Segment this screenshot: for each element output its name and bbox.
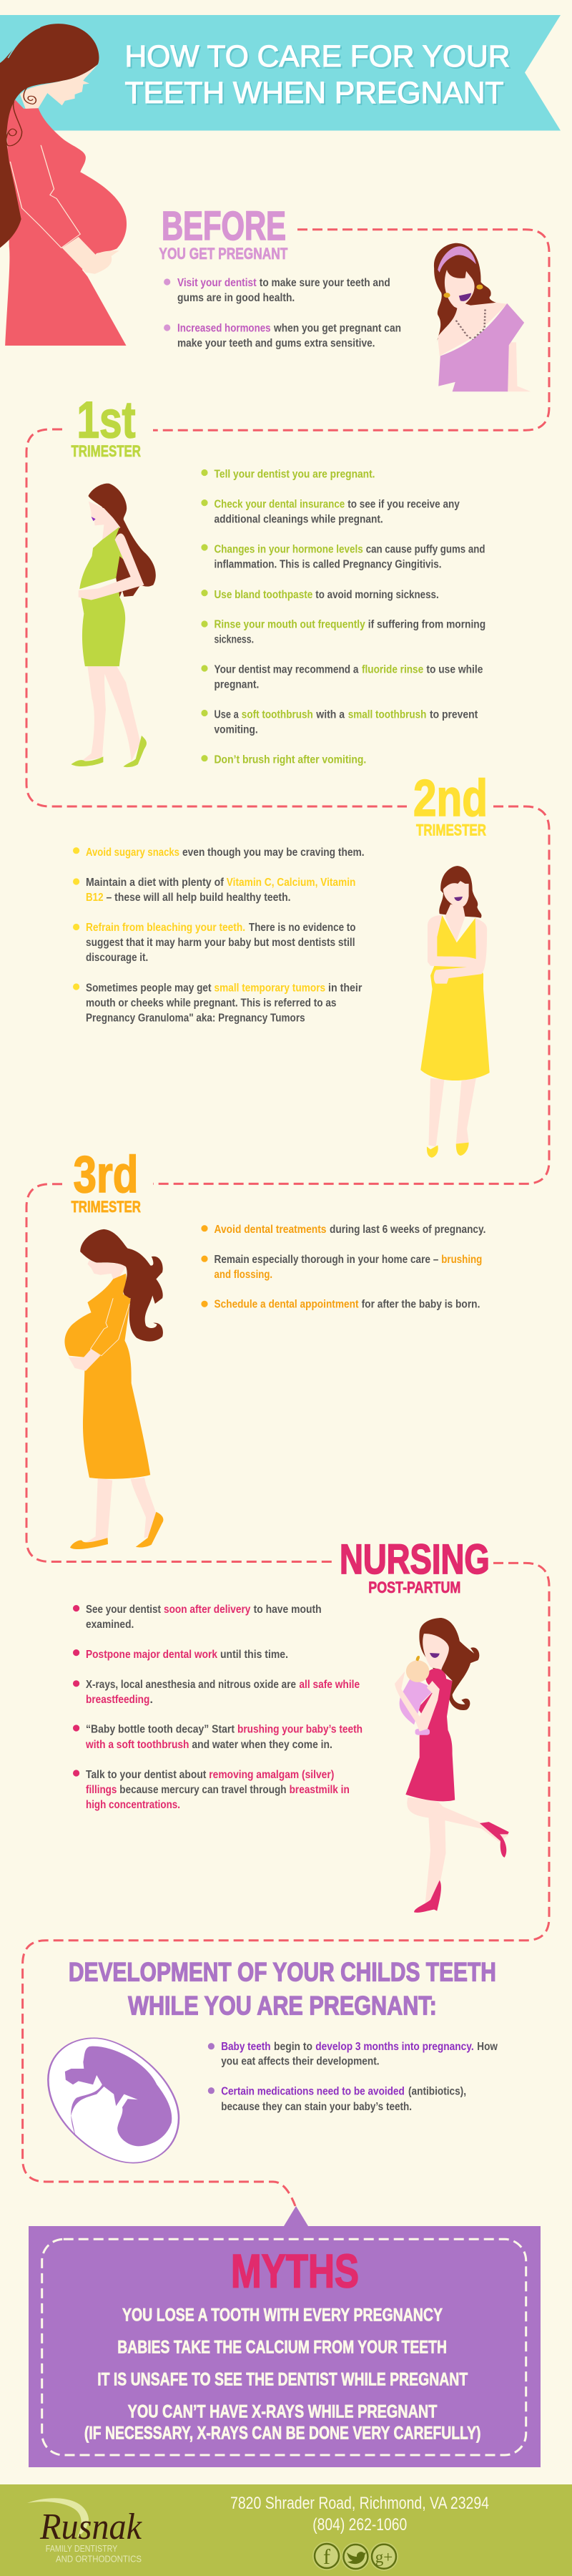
title banner: HOW TO CARE FOR YOUR	[124, 39, 511, 74]
contact details	[230, 2494, 489, 2534]
bullet list: second trimester: – these will all help build healthy teeth.	[106, 892, 290, 904]
heading: myths: MYTHS	[231, 2245, 359, 2298]
panel: myths	[29, 2206, 541, 2467]
heading: nursing: NURSING	[340, 1536, 490, 1583]
footer	[0, 2484, 572, 2576]
bullet list: development: because they can stain your baby’s teeth.	[221, 2101, 412, 2113]
bullet list: second trimester: suggest that it may harm your baby but most dentists still	[86, 937, 355, 949]
icon: facebook: f	[323, 2545, 330, 2569]
bullet list: first trimester: Changes in your hormone levels	[214, 544, 363, 556]
heading: nursing: POST-PARTUM	[368, 1579, 460, 1596]
bullet list: development: you eat affects their development.	[221, 2056, 380, 2068]
bullet list: first trimester: to avoid morning sickness.	[315, 589, 439, 601]
bullet list: nursing: all safe while	[299, 1679, 360, 1691]
bullet list: development	[208, 2041, 498, 2113]
bullet list: first trimester: additional cleanings while pregnant.	[214, 514, 383, 526]
icon: facebook	[312, 2542, 341, 2570]
bullet list: first trimester: vomiting.	[214, 724, 258, 736]
contact details: 7820 Shrader Road, Richmond, VA 23294	[230, 2494, 489, 2513]
bullet list: nursing: brushing your baby’s teeth	[237, 1724, 363, 1736]
heading: 2nd trimester: 2nd	[413, 770, 488, 827]
bullet list: nursing: breastmilk in	[290, 1784, 350, 1796]
bullet list: development: Certain medications need to be avoided	[221, 2086, 405, 2098]
bullet list: third trimester: during last 6 weeks of pregnancy.	[330, 1224, 485, 1236]
bullet list: development: How	[477, 2041, 498, 2053]
bullet list: second trimester: in their	[328, 982, 362, 994]
bullet list: second trimester: even though you may be craving them.	[182, 847, 365, 859]
panel: second trimester	[73, 770, 490, 1158]
myth statements: YOU CAN’T HAVE X-RAYS WHILE PREGNANT	[128, 2402, 437, 2422]
bullet list: first trimester: can cause puffy gums and	[366, 544, 485, 556]
bullet list: first trimester: to see if you receive any	[347, 498, 460, 511]
bullet list: second trimester	[73, 847, 365, 1025]
bullet list: first trimester: to prevent	[430, 708, 478, 721]
bullet list: first trimester: small toothbrush	[348, 708, 426, 721]
bullet list: nursing: Postpone major dental work	[86, 1649, 217, 1661]
bullet list: before: when you get pregnant can	[273, 322, 401, 334]
icon: google plus	[370, 2542, 398, 2571]
bullet list: second trimester: Vitamin C, Calcium, Vitamin	[227, 877, 355, 889]
heading: before: BEFORE	[162, 203, 286, 249]
bullet list: development: Baby teeth	[221, 2041, 271, 2053]
bullet list: before: Visit your dentist	[177, 277, 257, 289]
bullet list: before	[164, 277, 401, 349]
heading: 2nd trimester: TRIMESTER	[416, 821, 486, 839]
bullet list: nursing: “Baby bottle tooth decay” Start	[86, 1724, 235, 1736]
bullet list: nursing: high concentrations.	[86, 1799, 180, 1811]
myth statements: YOU LOSE A TOOTH WITH EVERY PREGNANCY	[122, 2306, 443, 2326]
bullet list: nursing: and water when they come in.	[192, 1739, 332, 1751]
heading: 1st trimester	[72, 392, 141, 460]
bullet list: second trimester: Pregnancy Granuloma" aka: Pregnancy Tumors	[86, 1012, 305, 1025]
heading: 3rd trimester: TRIMESTER	[72, 1198, 141, 1216]
panel: before	[159, 203, 531, 391]
illustration: woman in green dress	[71, 484, 156, 767]
bullet list: nursing: X-rays, local anesthesia and nitrous oxide are	[86, 1679, 296, 1691]
bullet list: first trimester: if suffering from morning	[368, 618, 485, 631]
bullet list: nursing: removing amalgam (silver)	[209, 1769, 334, 1781]
bullet list: first trimester: Tell your dentist you are pregnant.	[214, 468, 375, 480]
icon: google plus: g+	[375, 2548, 393, 2566]
panel: nursing	[73, 1536, 509, 1913]
bullet list: first trimester: with a	[315, 708, 345, 721]
bullet list: second trimester: small temporary tumors	[214, 982, 325, 994]
panel: first trimester	[71, 392, 485, 767]
bullet list: first trimester: sickness.	[214, 634, 254, 646]
bullet list: first trimester: to use while	[426, 663, 483, 675]
bullet list: nursing: .	[150, 1694, 153, 1706]
bullet list: nursing: because mercury can travel through	[119, 1784, 286, 1796]
myth statements	[84, 2306, 480, 2443]
bullet list: before: to make sure your teeth and	[260, 277, 390, 289]
icon: twitter	[341, 2542, 370, 2571]
bullet list: second trimester: B12	[86, 892, 104, 904]
bullet list: first trimester: Check your dental insurance	[214, 498, 345, 511]
heading: 2nd trimester	[413, 770, 488, 839]
bullet list: second trimester: Refrain from bleaching your teeth.	[86, 922, 245, 934]
bullet list: nursing: See your dentist	[86, 1604, 162, 1616]
bullet list: nursing: until this time.	[220, 1649, 288, 1661]
bullet list: first trimester: inflammation. This is called Pregnancy Gingitivis.	[214, 559, 442, 571]
icon: fetus in womb	[48, 2038, 179, 2163]
bullet list: third trimester: for after the baby is born.	[362, 1299, 480, 1311]
bullet list: before: gums are in good health.	[177, 292, 295, 304]
myth statements: BABIES TAKE THE CALCIUM FROM YOUR TEETH	[117, 2338, 447, 2358]
bullet list: first trimester: pregnant.	[214, 678, 259, 691]
bullet list: nursing: fillings	[86, 1784, 117, 1796]
bullet list: nursing: Talk to your dentist about	[86, 1769, 207, 1781]
title banner: TEETH WHEN PREGNANT	[124, 76, 503, 110]
bullet list: first trimester: Rinse your mouth out frequently	[214, 618, 365, 631]
bullet list: third trimester: Remain especially thorough in your home care –	[214, 1254, 438, 1266]
bullet list: before: Increased hormones	[177, 322, 271, 334]
bullet list: second trimester: There is no evidence to	[249, 922, 356, 934]
bullet list: development: (antibiotics),	[408, 2086, 466, 2098]
logo: Rusnak Family Dentistry and Orthodontics: AND ORTHODONTICS	[56, 2554, 142, 2565]
illustration: woman with headband	[434, 243, 531, 391]
bullet list: nursing: soon after delivery	[164, 1604, 250, 1616]
bullet list: second trimester: Avoid sugary snacks	[86, 847, 179, 859]
heading: development: WHILE YOU ARE PREGNANT:	[128, 1991, 437, 2020]
illustration: woman holding baby	[395, 1618, 509, 1913]
myth statements: IT IS UNSAFE TO SEE THE DENTIST WHILE PREGNANT	[97, 2370, 468, 2390]
heading: 1st trimester: 1st	[77, 392, 136, 449]
bullet list: development: begin to	[274, 2041, 312, 2053]
heading: before	[159, 203, 288, 263]
heading: 3rd trimester	[72, 1146, 141, 1216]
bullet list: first trimester: fluoride rinse	[362, 663, 423, 675]
dashed connector path	[23, 230, 549, 2206]
illustration: woman in orange dress	[64, 1229, 163, 1549]
heading: before: YOU GET PREGNANT	[159, 245, 288, 263]
panel: development of child's teeth	[48, 1957, 498, 2163]
heading: 3rd trimester: 3rd	[73, 1146, 139, 1204]
logo: Rusnak Family Dentistry and Orthodontics: FAMILY DENTISTRY	[46, 2543, 118, 2554]
bullet list: before: make your teeth and gums extra sensitive.	[177, 338, 375, 349]
bullet list: development: develop 3 months into pregnancy.	[315, 2041, 474, 2053]
bullet list: first trimester: Your dentist may recommend a	[214, 663, 359, 675]
heading: 1st trimester: TRIMESTER	[72, 442, 141, 460]
logo: Rusnak Family Dentistry and Orthodontics	[27, 2498, 142, 2565]
bullet list: first trimester	[201, 468, 485, 766]
heading: development	[69, 1957, 496, 2020]
contact details: (804) 262-1060	[312, 2515, 407, 2534]
illustration: woman in yellow dress	[420, 866, 490, 1158]
illustration: pregnant woman in coral dress	[0, 24, 127, 346]
heading: nursing	[340, 1536, 490, 1596]
bullet list: nursing: breastfeeding	[86, 1694, 149, 1706]
logo: Rusnak Family Dentistry and Orthodontics: Rusnak	[39, 2507, 142, 2547]
bullet list: nursing: to have mouth	[254, 1604, 322, 1616]
bullet list: first trimester: Use a	[214, 708, 239, 721]
bullet list: third trimester: Schedule a dental appointment	[214, 1299, 359, 1311]
bullet list: nursing: examined.	[86, 1619, 134, 1631]
bullet list: third trimester: Avoid dental treatments	[214, 1224, 327, 1236]
bullet list: second trimester: Maintain a diet with plenty of	[86, 877, 224, 889]
bullet list: third trimester: brushing	[441, 1254, 482, 1266]
bullet list: second trimester: discourage it.	[86, 952, 148, 964]
bullet list: nursing: with a soft toothbrush	[85, 1739, 189, 1751]
title banner	[0, 15, 561, 130]
bullet list: third trimester	[201, 1224, 485, 1311]
bullet list: first trimester: Use bland toothpaste	[214, 589, 312, 601]
bullet list: first trimester: Don’t brush right after vomiting.	[214, 754, 366, 766]
panel: third trimester	[64, 1146, 485, 1549]
bullet list: nursing	[73, 1604, 363, 1811]
bullet list: third trimester: and flossing.	[214, 1269, 272, 1281]
bullet list: first trimester: soft toothbrush	[242, 708, 313, 721]
bullet list: second trimester: Sometimes people may get	[86, 982, 212, 994]
bullet list: second trimester: mouth or cheeks while pregnant. This is referred to as	[86, 997, 337, 1009]
